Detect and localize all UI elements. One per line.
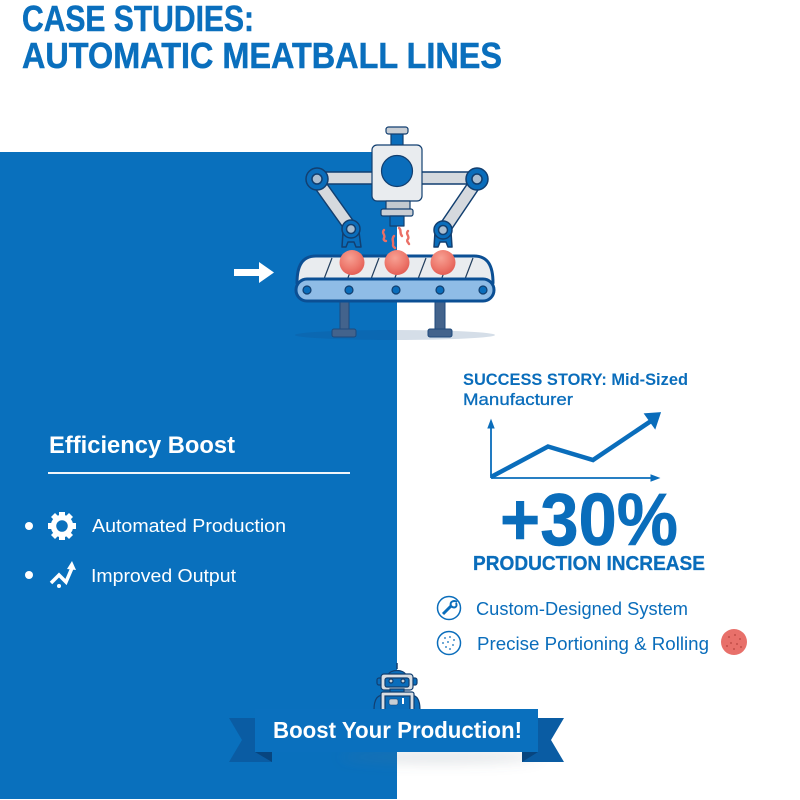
title: AUTOMATIC MEATBALL LINES bbox=[22, 35, 502, 76]
stat label: production increase: PRODUCTION INCREASE bbox=[473, 553, 705, 575]
robot head unit bbox=[372, 127, 422, 226]
robot arms bbox=[306, 168, 488, 247]
list item: automated production: Automated Production bbox=[92, 516, 286, 536]
banner: boost your production bbox=[229, 709, 564, 764]
banner: boost your production: Boost Your Production! bbox=[273, 717, 522, 743]
panel: blue left background bbox=[0, 152, 397, 799]
heading: success story: SUCCESS STORY: Mid-Sized bbox=[463, 370, 688, 389]
conveyor belt bbox=[296, 256, 494, 301]
heading: efficiency boost: Efficiency Boost bbox=[49, 432, 235, 459]
icon: wrench bbox=[438, 596, 460, 620]
icon: dotted portion circle bbox=[438, 632, 460, 654]
stat: +30%: +30% bbox=[500, 478, 678, 561]
heading: success story bbox=[463, 370, 688, 409]
steam squiggles bbox=[383, 228, 409, 248]
feature: precise portioning and rolling: Precise Portioning & Rolling bbox=[477, 634, 709, 654]
list item: automated production bbox=[25, 512, 286, 540]
icon: robot mascot bbox=[374, 663, 420, 711]
ribbon front bbox=[255, 709, 538, 752]
feature: custom-designed system: Custom-Designed System bbox=[476, 599, 688, 619]
icon: white arrow into machine bbox=[234, 262, 274, 283]
icon: gear bbox=[48, 512, 76, 540]
list item: improved output bbox=[25, 561, 236, 588]
conveyor legs bbox=[332, 300, 452, 337]
illustration: robotic meatball conveyor bbox=[295, 127, 495, 340]
line chart: rising production bbox=[488, 413, 660, 481]
list item: improved output: Improved Output bbox=[91, 566, 236, 586]
ribbon tails bbox=[229, 718, 564, 762]
divider line bbox=[48, 472, 350, 474]
icon: rising output arrow bbox=[51, 561, 76, 588]
title bbox=[22, 0, 502, 76]
ribbon folds bbox=[255, 752, 538, 762]
floor shadow bbox=[295, 330, 495, 340]
meatballs bbox=[340, 250, 456, 275]
heading: success story: Manufacturer bbox=[463, 390, 573, 409]
icon: meatball bbox=[721, 629, 747, 655]
